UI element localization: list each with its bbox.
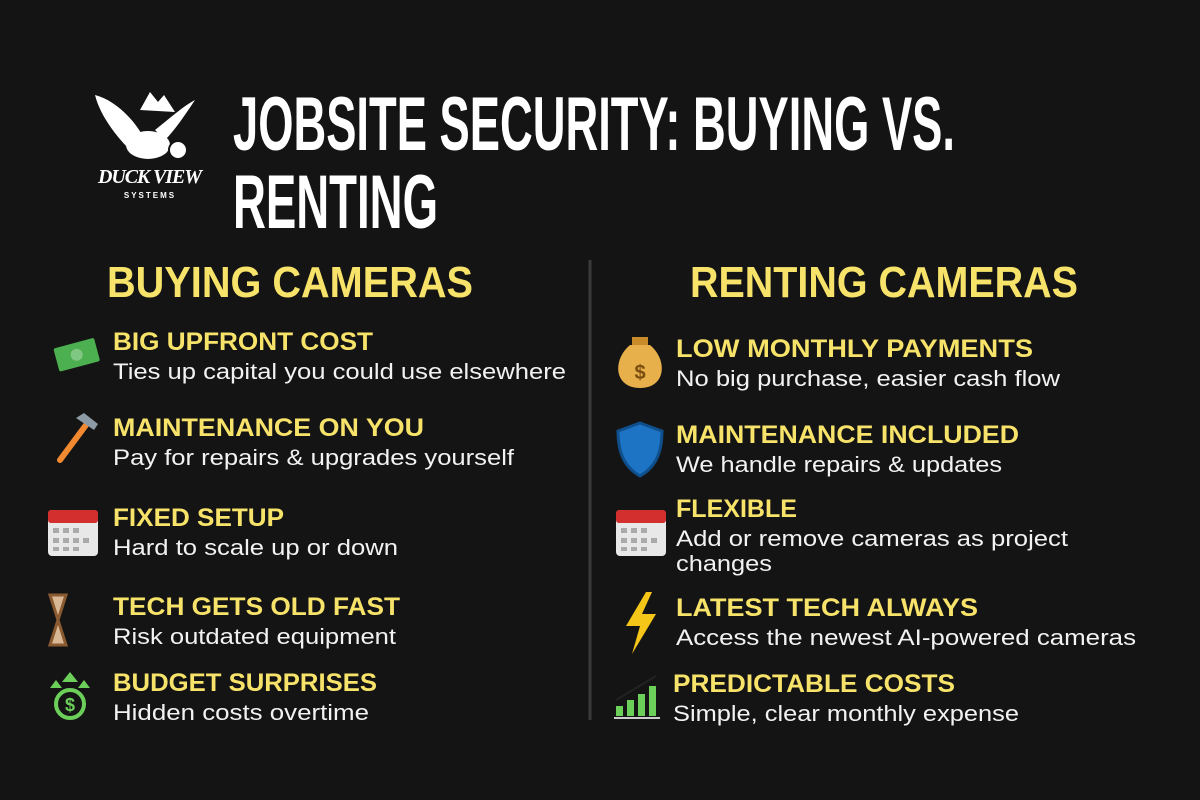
item: tech gets old fast: TECH GETS OLD FAST [113,593,400,621]
item: maintenance included: We handle repairs & updates [676,452,1002,477]
item: budget surprises: Hidden costs overtime [113,700,369,725]
heading: renting cameras: RENTING CAMERAS [690,258,1078,307]
item: big upfront cost: BIG UPFRONT COST [113,328,373,356]
logo: Duck View Systems [95,92,203,200]
item: latest tech always [626,592,1136,654]
heading: buying cameras: BUYING CAMERAS [107,258,473,307]
item: maintenance on you: MAINTENANCE ON YOU [113,414,424,442]
item: budget surprises [50,669,377,725]
item: flexible: FLEXIBLE [676,495,797,523]
divider [588,260,592,720]
item: big upfront cost: Ties up capital you could use elsewhere [113,359,566,384]
item: tech gets old fast: Risk outdated equipment [113,624,396,649]
item: fixed setup: FIXED SETUP [113,504,284,532]
item: flexible: Add or remove cameras as project [676,526,1068,551]
item: low monthly payments: No big purchase, easier cash flow [676,366,1060,391]
item: predictable costs: Simple, clear monthly expense [673,701,1019,726]
title [233,82,955,245]
item: maintenance on you [60,413,515,470]
item: flexible: changes [676,551,772,576]
item: latest tech always: LATEST TECH ALWAYS [676,594,978,622]
panel: renting list [614,335,1136,726]
item: tech gets old fast [50,593,400,649]
item: fixed setup: Hard to scale up or down [113,535,398,560]
logo: Duck View Systems: SYSTEMS [124,191,176,200]
item: maintenance on you: Pay for repairs & upgrades yourself [113,445,515,470]
item: flexible [616,495,1068,576]
item: low monthly payments [618,335,1060,391]
title: RENTING [233,160,438,245]
item: predictable costs [614,670,1019,726]
item: maintenance included: MAINTENANCE INCLUDED [676,421,1019,449]
item: low monthly payments: $ [634,362,646,384]
item: fixed setup [48,504,398,560]
item: maintenance included [618,421,1019,477]
logo: Duck View Systems: DUCK VIEW [97,166,203,188]
item: predictable costs: PREDICTABLE COSTS [673,670,955,698]
item: latest tech always: Access the newest AI-powered cameras [676,625,1136,650]
item: budget surprises: $ [65,695,75,715]
item: big upfront cost [53,328,566,384]
panel: buying list [48,328,566,725]
item: low monthly payments: LOW MONTHLY PAYMENTS [676,335,1033,363]
item: budget surprises: BUDGET SURPRISES [113,669,377,697]
